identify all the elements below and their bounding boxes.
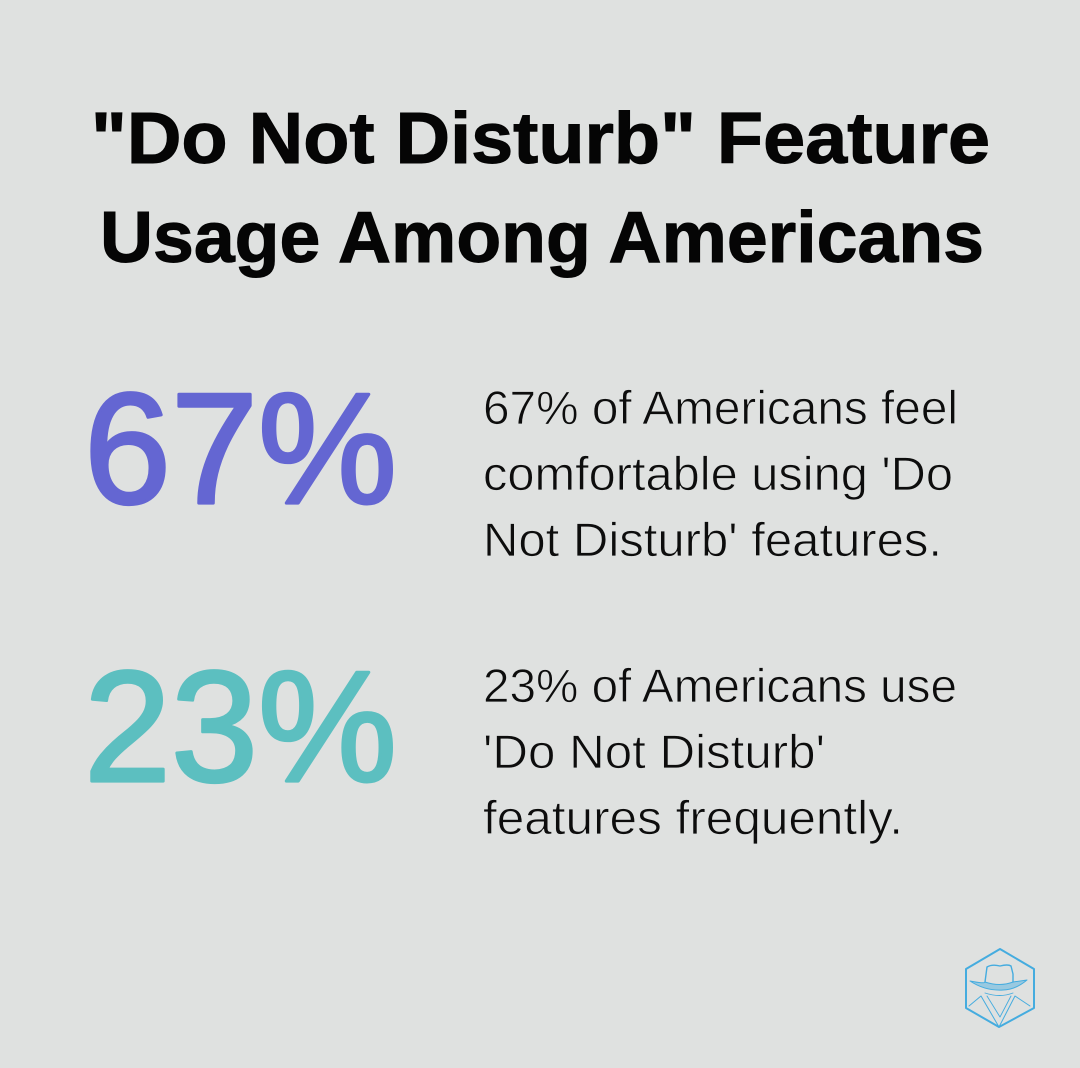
title xyxy=(91,99,990,278)
text block: 23 percent description: features frequently. xyxy=(483,791,903,844)
text block: 67 percent description: comfortable using 'Do xyxy=(483,447,953,500)
text block: 23 percent description: 'Do Not Disturb' xyxy=(483,725,825,778)
text block: 23 percent description: 23% of Americans use xyxy=(483,659,957,712)
title: Usage Among Americans xyxy=(100,198,984,278)
stat: 67 percent: 67% xyxy=(84,361,397,537)
text block: 67 percent description: 67% of Americans feel xyxy=(483,381,958,434)
title: "Do Not Disturb" Feature xyxy=(91,99,990,179)
text block: 67 percent description: Not Disturb' features. xyxy=(483,513,942,566)
stat: 23 percent: 23% xyxy=(84,639,397,815)
icon: hexagon logo with hat and coat figure xyxy=(966,949,1034,1027)
text block: 67 percent description xyxy=(483,381,958,566)
text block: 23 percent description xyxy=(483,659,957,844)
